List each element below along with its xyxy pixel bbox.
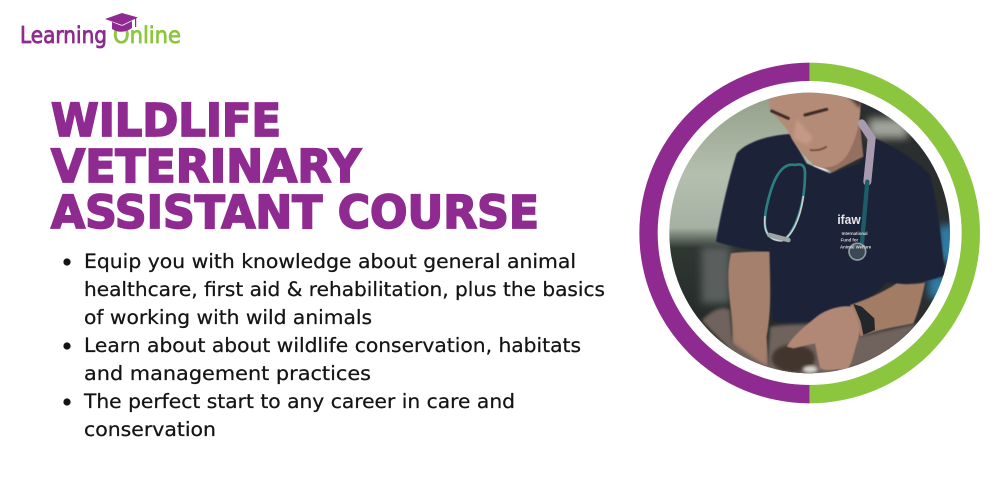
stethoscope	[765, 123, 872, 260]
bullet 1: animal healthcare: of working with wild animals	[84, 306, 372, 329]
bullet 3: career start: The perfect start to any career in care and	[83, 390, 515, 413]
shirt logo text: ifaw	[837, 212, 861, 227]
photo: vet examining koala	[669, 92, 950, 374]
bullet 2: conservation	[64, 334, 581, 385]
bullet 2: conservation: Learn about about wildlife conservation, habitats	[84, 334, 581, 357]
ring: green half	[810, 63, 980, 403]
bullet 1: animal healthcare: Equip you with knowledge about general animal	[84, 250, 576, 273]
neck	[812, 125, 864, 172]
logo wordmark: Learning	[20, 23, 107, 49]
nose	[794, 121, 812, 144]
logo: Learning Online	[20, 13, 181, 49]
bullet 1: animal healthcare: healthcare, first aid & rehabilitation, plus the basics	[84, 278, 605, 301]
photo: vet examining koala: Fund for	[841, 238, 859, 243]
hand	[787, 306, 859, 370]
title: WILDLIFE	[51, 94, 281, 147]
logo wordmark: Online	[113, 23, 181, 49]
title	[50, 94, 539, 239]
hair	[846, 98, 862, 110]
watch	[853, 304, 875, 335]
fur	[702, 308, 917, 378]
bullet 3: career start	[64, 390, 515, 441]
left arm	[728, 252, 770, 367]
circular photo with two-colour ring	[639, 62, 980, 404]
ring: purple half	[639, 63, 810, 403]
bullet 1: animal healthcare	[64, 250, 605, 329]
photo: vet examining koala: International	[842, 231, 868, 236]
mouth	[810, 147, 827, 150]
shirt	[716, 134, 945, 324]
bullet list	[63, 250, 605, 441]
title: ASSISTANT COURSE	[51, 186, 539, 239]
title: VETERINARY	[51, 140, 362, 193]
icon: graduation cap	[105, 13, 138, 32]
bullet 2: conservation: and management practices	[84, 362, 371, 385]
eyebrows and eyes	[772, 109, 827, 118]
logo wordmark	[20, 23, 181, 49]
right forearm	[850, 283, 925, 337]
photo: vet examining koala: Animal Welfare	[840, 244, 872, 249]
bullet 3: career start: conservation	[84, 418, 216, 441]
head	[768, 92, 861, 167]
koala dark patch	[772, 344, 815, 372]
